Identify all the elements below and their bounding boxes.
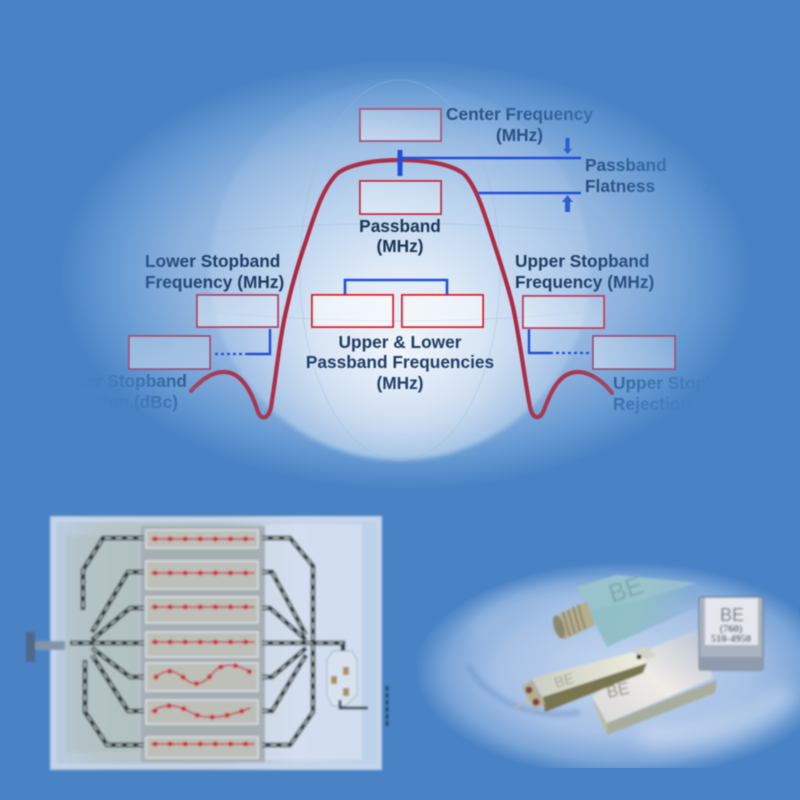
passband label: Passband (359, 216, 441, 236)
upper stopband connector (529, 329, 550, 353)
red resonators (152, 539, 254, 744)
teal cube filter: BE (605, 569, 647, 609)
upper stopband dotted leader (550, 352, 592, 354)
center frequency tick (398, 150, 402, 176)
lower stopband dotted leader (212, 353, 248, 355)
upper stopband frequency label: Upper Stopband (515, 251, 649, 271)
upper rejection label: Upper Stopband (613, 373, 747, 393)
upper and lower passband frequencies label: Passband Frequencies (306, 352, 494, 372)
lower passband box (312, 295, 393, 327)
side marking (386, 686, 388, 728)
BE logo mark: BE (720, 605, 744, 625)
upper and lower passband frequencies label: Upper & Lower (339, 332, 462, 352)
lower stopband frequency label: Frequency (MHz) (145, 272, 284, 292)
faint 3: 3 (702, 176, 712, 196)
passband box (360, 181, 441, 214)
glow halo behind chart (60, 60, 750, 490)
passband flatness bottom line (478, 192, 581, 194)
upper stopband frequency label: Frequency (MHz) (515, 272, 654, 292)
chart labels (51, 104, 747, 414)
lower rejection label: Rejection (dBc) (51, 392, 178, 412)
upper and lower passband bracket (345, 280, 447, 295)
long gold bar filter (515, 646, 656, 712)
swirl (468, 665, 580, 714)
upper rejection box (593, 336, 675, 369)
filter channel rows (146, 530, 258, 758)
housing bevel (54, 520, 378, 766)
left coaxial connector (26, 632, 35, 662)
module phone marking: (760) (720, 624, 743, 635)
board housing (50, 516, 382, 770)
teal cube filter (577, 569, 697, 647)
upper passband box (402, 295, 483, 327)
coupling traces (70, 538, 343, 745)
photo: filter products (415, 562, 800, 768)
upper and lower passband frequencies label: (MHz) (376, 373, 424, 393)
product backdrop glow (415, 562, 800, 768)
channel cavity (141, 526, 265, 762)
lower stopband frequency label: Lower Stopband (145, 251, 280, 271)
globe (210, 80, 590, 460)
center frequency box (360, 109, 441, 141)
blue connectors (212, 150, 592, 354)
long gold bar filter: BE (552, 670, 576, 692)
flat base module (592, 630, 717, 735)
lower rejection label: Lower Stopband (52, 371, 187, 391)
right side connector (327, 651, 357, 706)
arrow up (562, 195, 573, 212)
upper rejection label: Rejection (dBc) (613, 394, 740, 414)
input boxes (129, 109, 675, 369)
filter response curve (191, 160, 612, 417)
passband flatness top line (400, 157, 581, 159)
lower stopband box (197, 295, 278, 327)
center frequency label: Center Frequency (446, 104, 593, 124)
lower rejection box (129, 336, 210, 369)
passband label: (MHz) (376, 236, 424, 256)
flatness arrows (562, 138, 573, 212)
center frequency label: (MHz) (496, 125, 543, 145)
threaded SMA connector (551, 601, 595, 640)
upper stopband box (523, 296, 604, 328)
passband flatness label: Flatness (585, 176, 655, 196)
flat base module: BE (605, 679, 631, 702)
arrow down (563, 138, 572, 154)
passband flatness label: Passband (585, 155, 667, 175)
square SMT module (699, 597, 763, 670)
photo: filter bank circuit board (26, 516, 387, 770)
module phone marking: 510-4950 (711, 634, 751, 645)
lower stopband connector (248, 329, 270, 354)
